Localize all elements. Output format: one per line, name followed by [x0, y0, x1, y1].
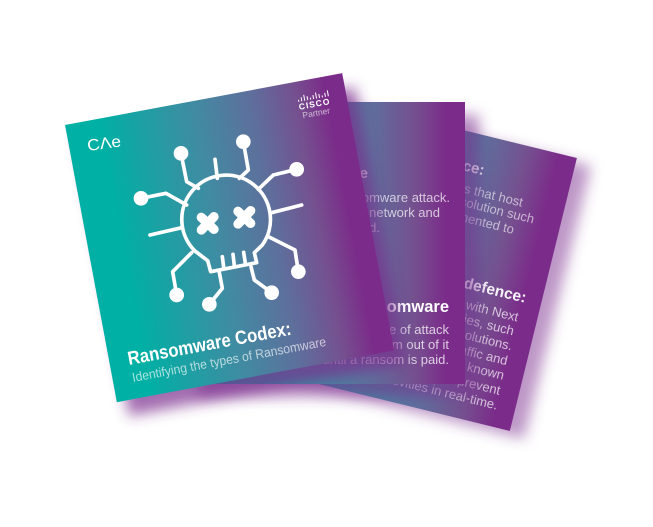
skull circuit icon [134, 134, 306, 312]
middle card text: pe of attack [382, 322, 449, 337]
back card text: solution such [459, 194, 536, 226]
back card [237, 91, 591, 439]
middle card shadow [197, 115, 479, 397]
middle card [191, 102, 479, 397]
back card text: with Next [464, 297, 520, 325]
wire end nodes [134, 134, 306, 312]
back card text: affic and [458, 342, 509, 368]
cisco bars [298, 90, 328, 102]
cisco wordmark: CISCO [298, 96, 331, 112]
Cisco partner logo [297, 90, 333, 121]
crossed eyes [201, 211, 251, 230]
middle card text: e [360, 165, 368, 182]
middle card panel [191, 102, 465, 384]
back card text: defence: [462, 275, 528, 307]
back card text: ce: [461, 157, 486, 179]
middle card text: em out of it [385, 337, 449, 352]
back card text: prevent [456, 373, 502, 398]
front card subtitle: Identifying the types of Ransomware [131, 334, 327, 385]
circuit wires [141, 142, 302, 304]
back card text: ities, such [456, 310, 516, 338]
middle card text: id. [366, 220, 380, 235]
back card text: mented to [456, 209, 516, 237]
front card [65, 73, 406, 416]
front card panel [65, 73, 394, 402]
CAE logo: CΛe [86, 133, 122, 155]
middle card text [323, 165, 450, 367]
back card panel [237, 91, 577, 431]
back card text: solutions. [457, 326, 514, 353]
front card shadow [78, 87, 406, 416]
middle card text: until a ransom is paid. [323, 352, 449, 367]
partner label: Partner [302, 105, 331, 120]
skull outline [182, 175, 270, 272]
middle card text: omware [387, 298, 449, 316]
back card shadow [251, 99, 591, 439]
middle card text: network and [369, 205, 440, 220]
front card title: Ransomware Codex: [126, 319, 293, 370]
back card text: known [466, 359, 506, 383]
back card text: s that host [463, 181, 525, 210]
teeth [222, 252, 245, 267]
middle card text: domware attack. [355, 190, 450, 205]
back card text: activities in real-time. [378, 369, 499, 413]
back card text [378, 150, 555, 413]
